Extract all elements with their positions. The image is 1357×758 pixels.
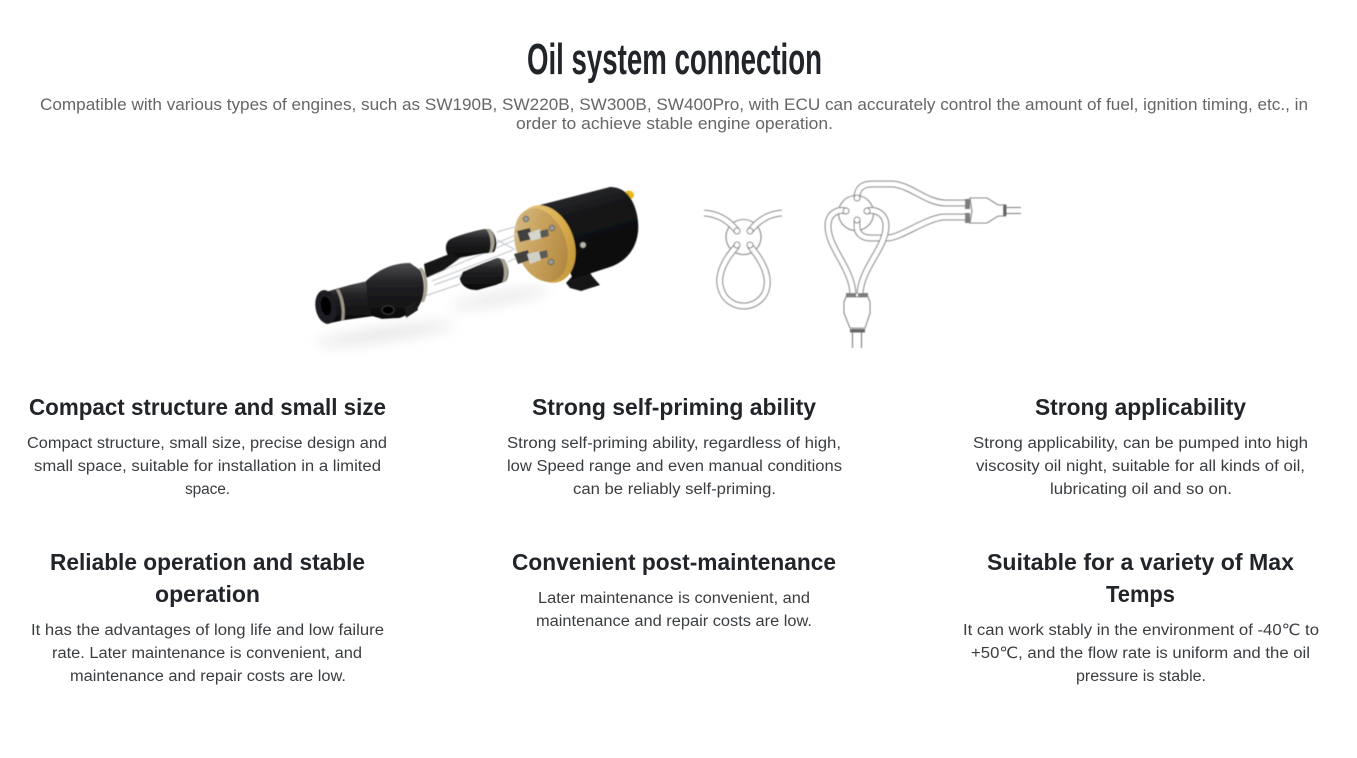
lower stem (405, 301, 418, 318)
feature: max temps: Suitable for a variety of Max (987, 549, 1294, 575)
feature: self-priming: can be reliably self-priming. (573, 481, 776, 498)
feature: reliable operation: maintenance and repair costs are low. (70, 668, 346, 685)
mounting foot (566, 266, 600, 291)
feature: max temps: pressure is stable. (1076, 668, 1206, 685)
feature: applicability: Strong applicability, can be pumped into high (973, 435, 1308, 452)
side port (382, 306, 394, 314)
feature: reliable operation: It has the advantages of long life and low failure (31, 622, 384, 639)
diagram: single loop connection (704, 213, 782, 306)
feature: self-priming: low Speed range and even manual conditions (507, 458, 842, 475)
title: Oil system connection (527, 35, 822, 84)
four-port plate (726, 220, 761, 254)
upper stem (424, 253, 460, 278)
feature: self-priming: Strong self-priming ability (532, 394, 816, 420)
feature: max temps: +50℃, and the flow rate is uniform and the oil (971, 645, 1310, 662)
front opening (313, 288, 339, 326)
subtitle: Compatible with various types of engines, such as SW190B, SW220B, SW300B, SW400Pro, with ECU can accurately control the amount of fuel, ignition timing, etc., in (40, 95, 1308, 114)
lower right tube (857, 217, 965, 238)
upper tube (857, 184, 965, 203)
feature: reliable operation: operation (155, 581, 260, 607)
feature: post-maintenance: Later maintenance is convenient, and (538, 590, 810, 607)
feature: applicability (973, 394, 1308, 498)
feature: post-maintenance: Convenient post-maintenance (512, 549, 836, 575)
inlet tubes (704, 213, 782, 231)
flange bolts (523, 216, 555, 265)
feature: max temps (963, 549, 1319, 685)
loop tube (720, 246, 767, 306)
feature: post-maintenance: maintenance and repair costs are low. (536, 613, 812, 630)
feature: reliable operation: Reliable operation and stable (50, 549, 365, 575)
brass rim (506, 197, 586, 291)
feature: max temps: Temps (1106, 581, 1175, 607)
bottom Y connector (844, 293, 870, 348)
tube ends (734, 228, 753, 248)
feature: max temps: It can work stably in the environment of -40℃ to (963, 622, 1319, 639)
clear tubes (425, 226, 520, 296)
feature: applicability: Strong applicability (1035, 394, 1246, 420)
upper fitting (446, 229, 496, 258)
right tube (860, 211, 886, 294)
black cylinder (540, 187, 638, 279)
four-port plate (838, 196, 874, 230)
central tee fitting (366, 263, 424, 319)
feature: compact structure: space. (185, 481, 230, 498)
feature: compact structure (27, 394, 387, 498)
metal nipples (514, 228, 549, 264)
feature: applicability: lubricating oil and so on. (1050, 481, 1232, 498)
feature: compact structure: Compact structure and small size (29, 394, 386, 420)
brass face (505, 201, 577, 289)
diagram: double Y connection (828, 184, 1021, 348)
subtitle: order to achieve stable engine operation. (516, 114, 833, 133)
feature: post-maintenance (512, 549, 836, 630)
soft shadow (315, 284, 550, 350)
front collar (322, 280, 374, 324)
feature: self-priming: Strong self-priming ability, regardless of high, (507, 435, 841, 452)
right Y connector (965, 198, 1021, 223)
left tube (828, 211, 853, 294)
tube ends (843, 195, 870, 223)
side screw (580, 242, 586, 248)
feature: reliable operation: rate. Later maintenance is convenient, and (52, 645, 362, 662)
feature: self-priming (507, 394, 842, 498)
lower fitting (460, 258, 508, 290)
feature: reliable operation (31, 549, 384, 685)
feature: compact structure: small space, suitable for installation in a limited (34, 458, 381, 475)
feature: compact structure: Compact structure, small size, precise design and (27, 435, 387, 452)
subtitle (40, 95, 1308, 133)
pump photo with exploded push-in fittings (313, 187, 638, 350)
feature: applicability: viscosity oil night, suitable for all kinds of oil, (976, 458, 1305, 475)
yellow cap (624, 190, 634, 200)
